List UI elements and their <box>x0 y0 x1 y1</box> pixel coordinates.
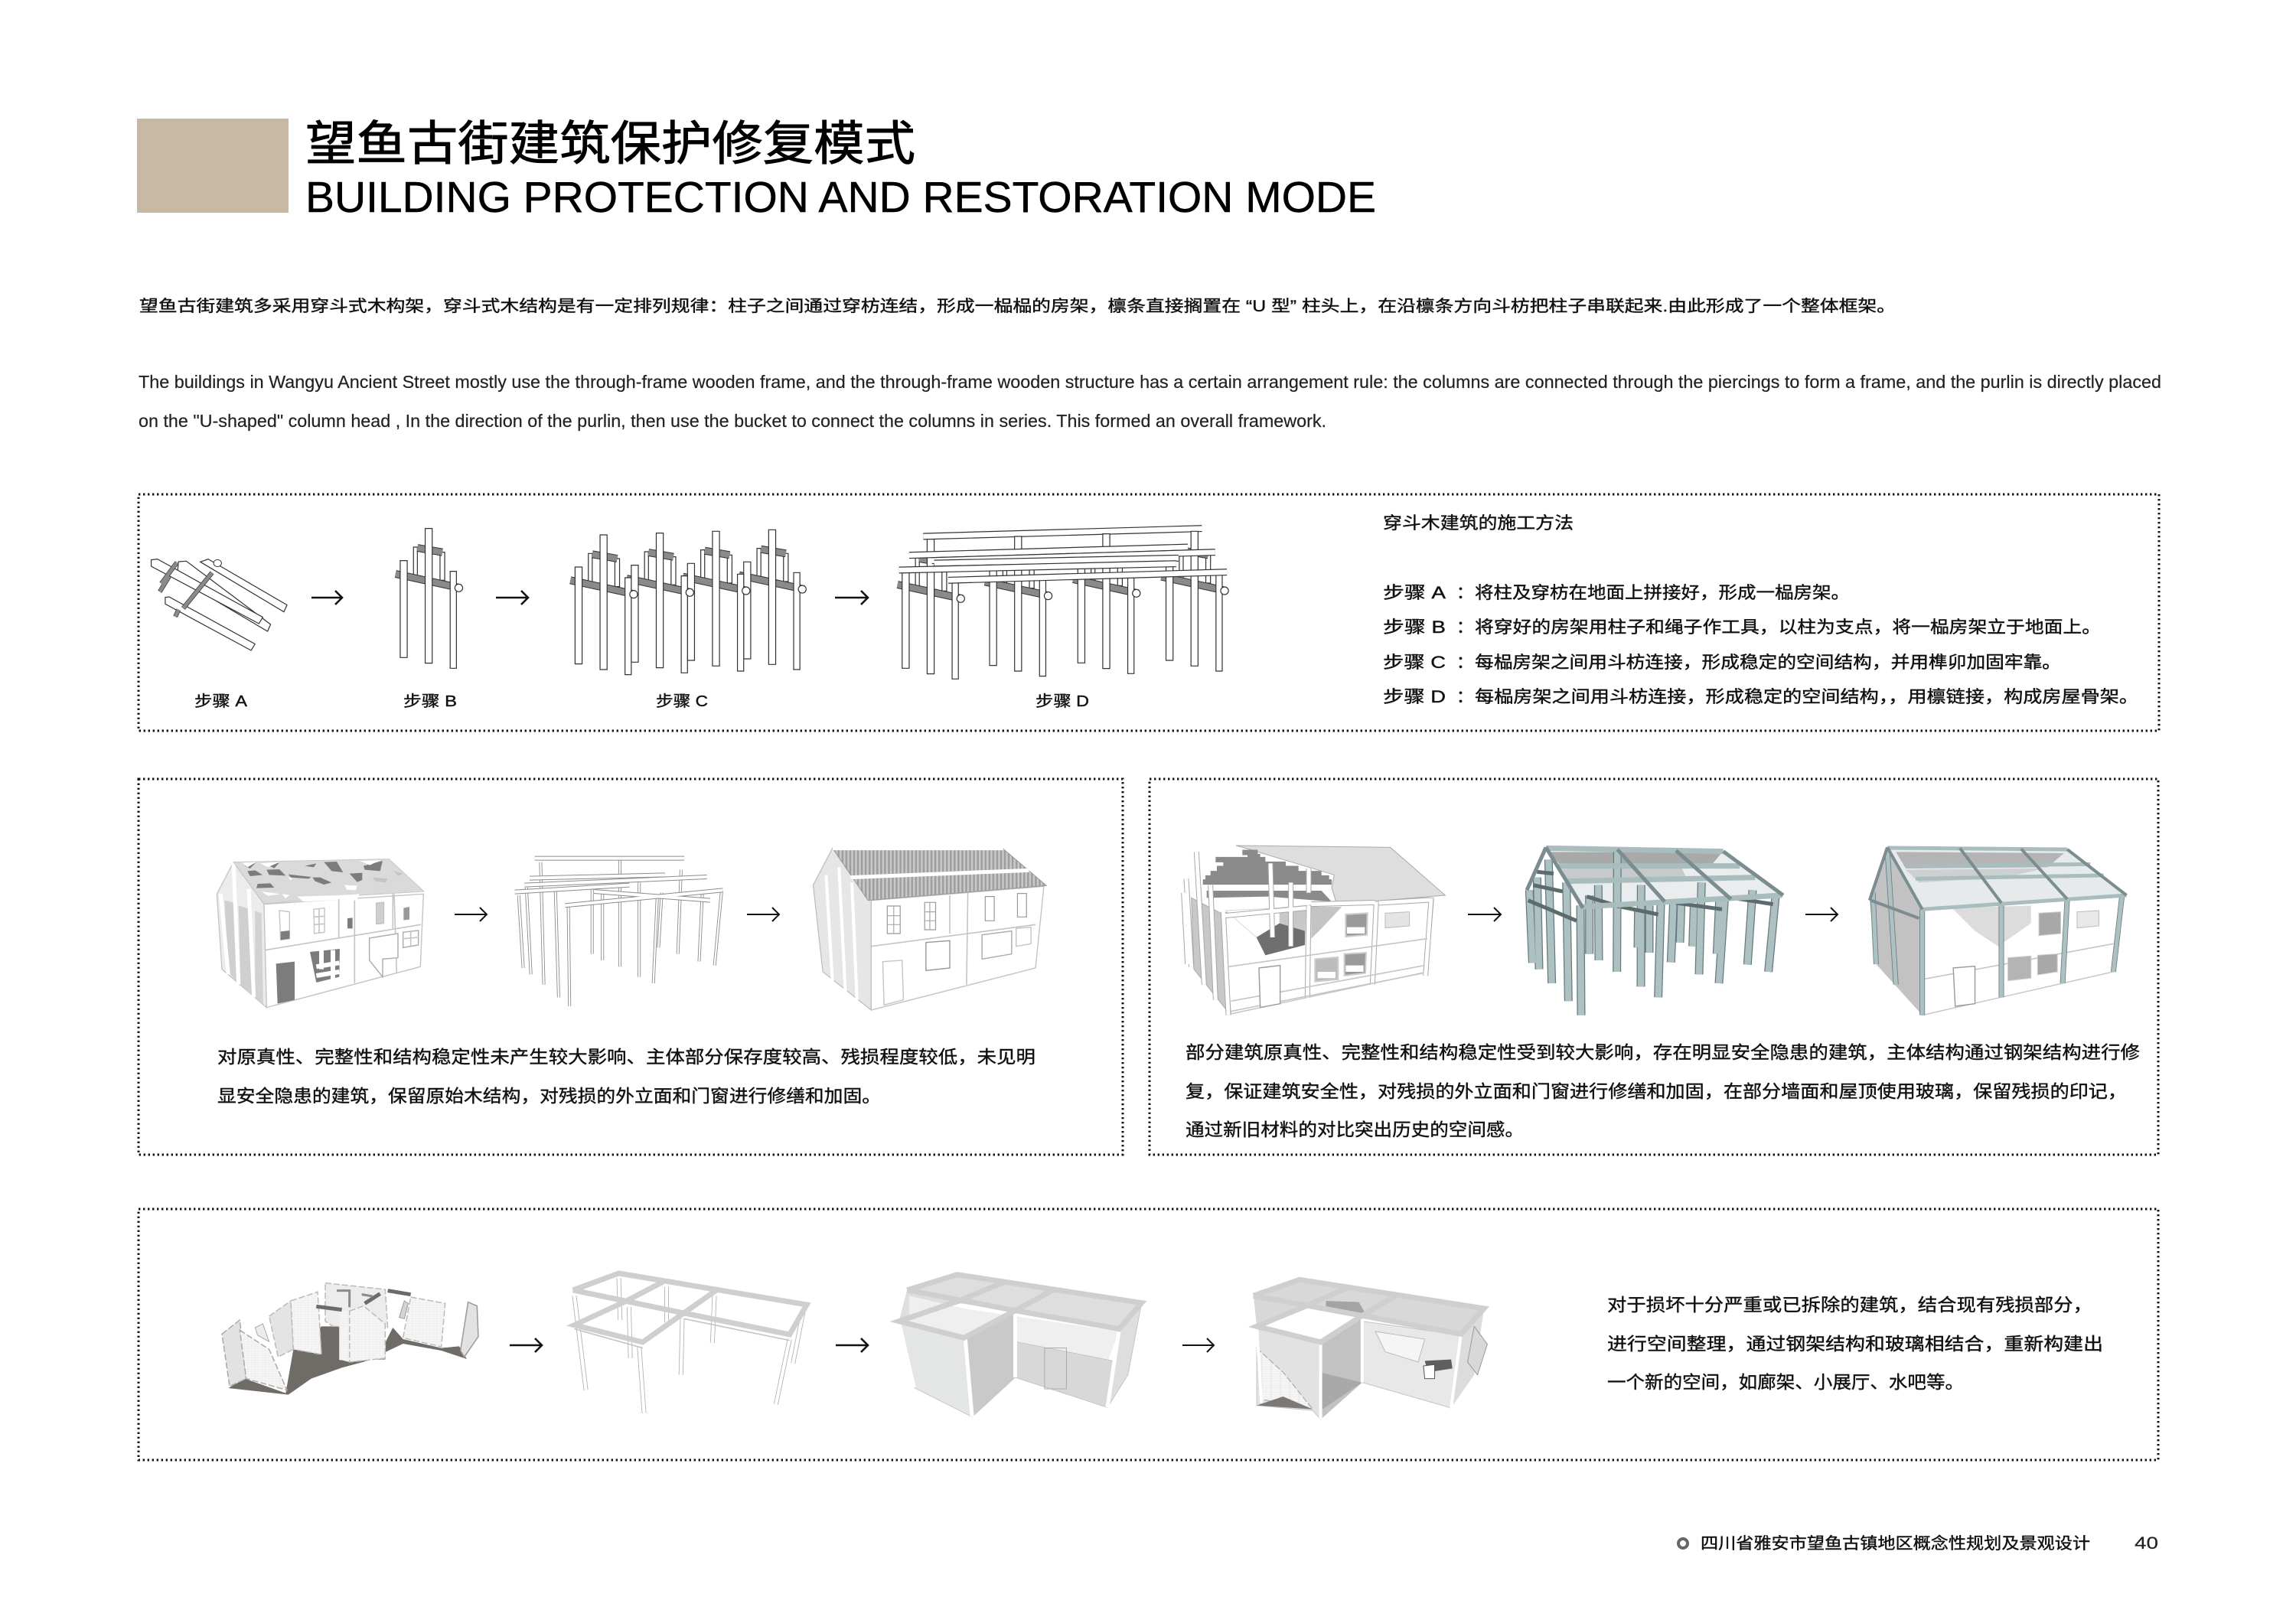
text block: minor damage description: 显安全隐患的建筑，保留原始木结构，对残损的外立面和门窗进行修缮和加固。 <box>217 1086 881 1106</box>
drawing: steel frame with glass roof <box>1527 847 1783 1015</box>
text block: severe damage description: 进行空间整理，通过钢架结构和玻璃相结合，重新构建出 <box>1607 1334 2103 1354</box>
footer icon <box>1678 1539 1688 1548</box>
text block: construction method: 将柱及穿枋在地面上拼接好，形成一榀房架。 <box>1475 583 1850 602</box>
label: step D: 步骤 D <box>1035 693 1089 710</box>
diagram: step B single frame raised <box>396 529 463 668</box>
drawing: damaged house with holed roof <box>217 859 424 1008</box>
drawing: ruined walls <box>222 1283 478 1395</box>
arrow 1 <box>510 1338 542 1352</box>
panel: severe damage reconstruction <box>139 1209 2158 1460</box>
arrow 2 <box>836 1338 868 1352</box>
footer project title: 四川省雅安市望鱼古镇地区概念性规划及景观设计 <box>1701 1535 2090 1553</box>
text block: construction method: ： <box>1456 618 1473 637</box>
arrow A to B <box>311 591 342 605</box>
arrow 2 <box>747 908 779 921</box>
text block: construction method: ： <box>1456 653 1473 672</box>
drawing: timber frame <box>515 859 723 1006</box>
text block: construction method: 步骤 D <box>1383 687 1446 706</box>
intro paragraph: English: on the "U-shaped" column head , In the direction of the purlin, then use the bucket to connect the columns in series. This formed an overall framework. <box>139 411 1326 431</box>
text block: construction method: 步骤 C <box>1383 653 1446 672</box>
text block: construction method: ： <box>1456 687 1473 706</box>
text block: construction method: 每榀房架之间用斗枋连接，形成稳定的空间结构，并用榫卯加固牢靠。 <box>1475 653 2061 672</box>
text block: construction method: ： <box>1456 583 1473 602</box>
panel: moderate damage repair <box>1150 779 2158 1155</box>
text block: moderate damage description: 复，保证建筑安全性，对残损的外立面和门窗进行修缮和加固，在部分墙面和屋顶使用玻璃，保留残损的印记， <box>1186 1081 2127 1101</box>
text block: minor damage description <box>217 1047 1035 1106</box>
text block: construction method: 每榀房架之间用斗枋连接，形成稳定的空间结构，，用檩链接，构成房屋骨架。 <box>1475 687 2138 706</box>
arrow 3 <box>1182 1338 1214 1352</box>
label: step B: 步骤 B <box>403 693 457 710</box>
drawing: ruin integrated within glass frame <box>1254 1279 1487 1419</box>
text block: moderate damage description: 通过新旧材料的对比突出历史的空间感。 <box>1186 1119 1524 1139</box>
page number: 40 <box>2135 1533 2158 1553</box>
arrow B to C <box>496 591 528 605</box>
text block: moderate damage description: 部分建筑原真性、完整性和结构稳定性受到较大影响，存在明显安全隐患的建筑，主体结构通过钢架结构进行修 <box>1186 1042 2140 1062</box>
drawing: new steel frame <box>573 1273 807 1413</box>
text block: construction method: 穿斗木建筑的施工方法 <box>1383 513 1574 533</box>
arrow C to D <box>835 591 868 605</box>
text block: severe damage description: 对于损坏十分严重或已拆除的建筑，结合现有残损部分， <box>1607 1295 2092 1315</box>
title: English: BUILDING PROTECTION AND RESTORATION MODE <box>305 173 1376 222</box>
arrow 1 <box>1468 908 1501 921</box>
text block: construction method: 将穿好的房架用柱子和绳子作工具，以柱为支点，将一榀房架立于地面上。 <box>1475 618 2101 637</box>
text block: construction method: 步骤 A <box>1383 583 1446 602</box>
text block: construction method <box>1383 513 2138 706</box>
label: step A: 步骤 A <box>194 693 248 710</box>
panel: construction steps <box>139 494 2159 731</box>
diagram: step A frame lying on ground <box>152 559 287 650</box>
text block: construction method: 步骤 B <box>1383 618 1446 637</box>
title: Chinese: 望鱼古街建筑保护修复模式 <box>305 118 915 171</box>
intro paragraph: English <box>139 372 2161 431</box>
drawing: repaired house with glass infill <box>1870 847 2127 1015</box>
text block: severe damage description: 一个新的空间，如廊架、小展厅、水吧等。 <box>1607 1372 1964 1392</box>
text block: severe damage description <box>1607 1295 2103 1392</box>
diagram: step D full frame with purlins <box>898 529 1228 679</box>
arrow 2 <box>1805 908 1838 921</box>
title colour block <box>137 119 289 213</box>
intro paragraph: Chinese: 望鱼古街建筑多采用穿斗式木构架，穿斗式木结构是有一定排列规律：柱子之间通过穿枋连结，形成一榀榀的房架，檩条直接搁置在 “U 型” 柱头上，在沿檩条方向斗枋把柱子串联起来.由此形成了一个整体框架。 <box>139 298 1896 315</box>
drawing: partly collapsed house <box>1184 846 1445 1015</box>
panel: minor damage repair <box>139 779 1123 1155</box>
diagram: step C four frames <box>570 530 806 675</box>
drawing: restored house <box>814 848 1046 1010</box>
text block: moderate damage description <box>1186 1042 2140 1139</box>
intro paragraph: English: The buildings in Wangyu Ancient Street mostly use the through-frame wooden frame, and the through-frame wooden structure has a certain arrangement rule: the columns are connected through the piercings to form a frame, and the purlin is directly placed <box>139 372 2161 392</box>
drawing: frame with glass enclosure <box>899 1274 1142 1417</box>
text block: minor damage description: 对原真性、完整性和结构稳定性未产生较大影响、主体部分保存度较高、残损程度较低，未见明 <box>217 1047 1035 1067</box>
label: step C: 步骤 C <box>656 693 708 710</box>
arrow 1 <box>455 908 487 921</box>
